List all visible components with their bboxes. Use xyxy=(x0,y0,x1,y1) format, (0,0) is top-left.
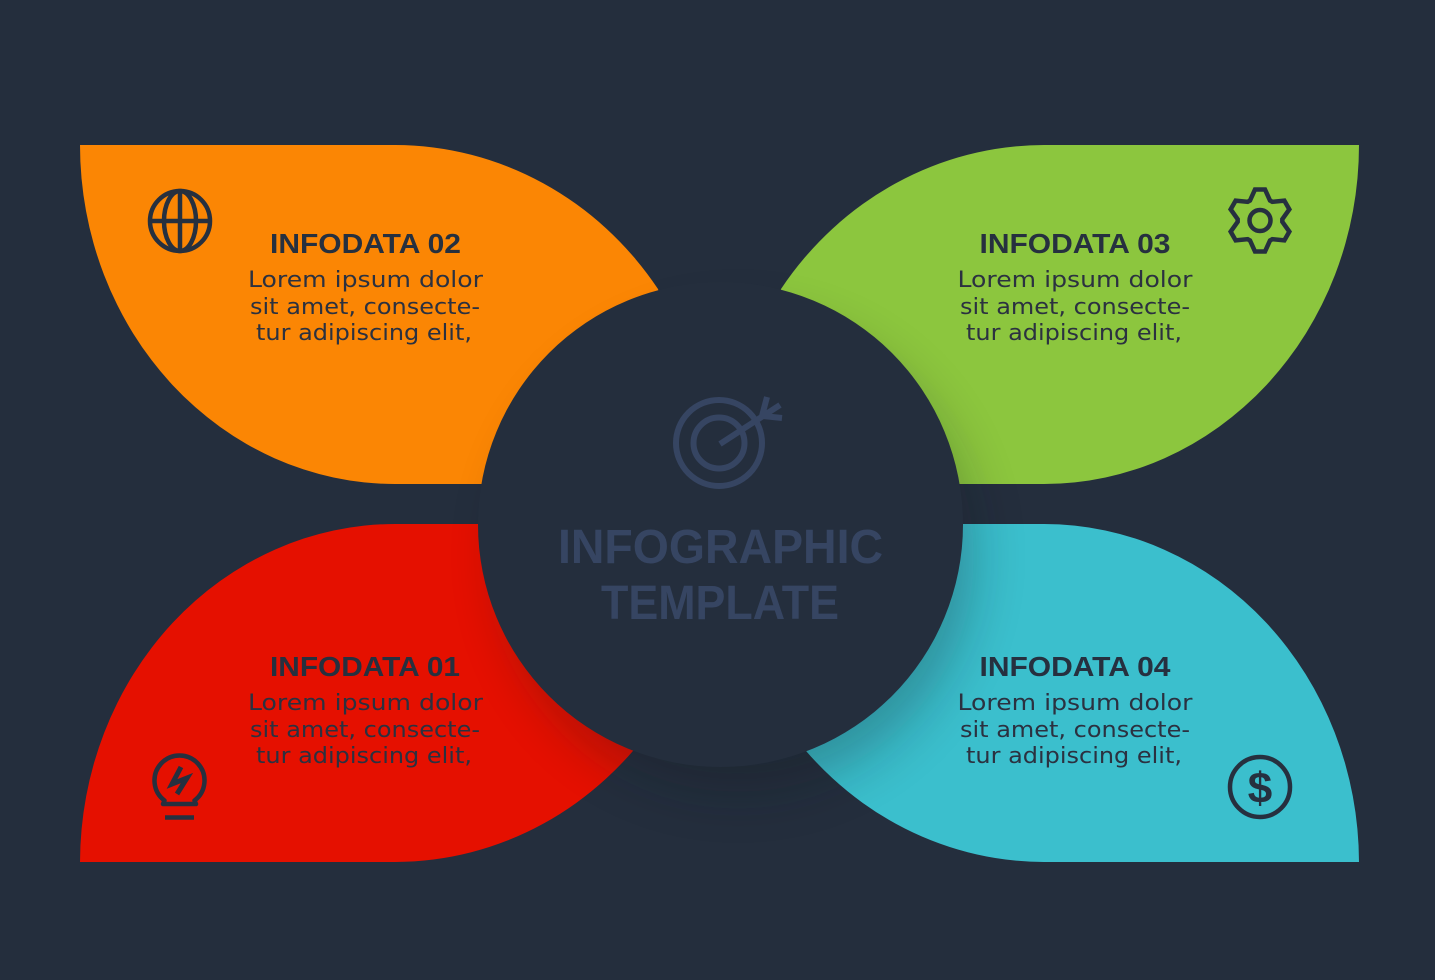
text block: infodata 02: INFODATA 02 xyxy=(270,228,461,259)
text block: infodata 01: Lorem ipsum dolor xyxy=(248,691,484,716)
panel: infodata 04 teal leaf xyxy=(720,500,1359,862)
text block: infodata 01: INFODATA 01 xyxy=(270,651,460,682)
text block: infodata 03 xyxy=(958,228,1194,346)
center title: TEMPLATE xyxy=(601,577,839,630)
icon: gear xyxy=(1231,190,1289,252)
icon: dollar coin xyxy=(1230,757,1290,817)
text block: infodata 04: tur adipiscing elit, xyxy=(966,744,1182,769)
text block: infodata 03: tur adipiscing elit, xyxy=(966,321,1182,346)
text block: infodata 04: sit amet, consecte- xyxy=(960,718,1190,743)
text block: infodata 02 xyxy=(248,228,484,346)
text block: infodata 03: INFODATA 03 xyxy=(980,228,1170,259)
icon: target with arrow xyxy=(676,397,782,486)
text block: infodata 04 xyxy=(958,651,1194,769)
icon: dollar coin: $ xyxy=(1248,764,1272,813)
center title xyxy=(558,521,883,630)
text block: infodata 04: INFODATA 04 xyxy=(980,651,1171,682)
icon: light bulb xyxy=(154,756,204,818)
text block: infodata 02: sit amet, consecte- xyxy=(250,295,480,320)
panel: infodata 01 red leaf xyxy=(80,500,720,862)
text block: infodata 01: tur adipiscing elit, xyxy=(256,744,472,769)
text block: infodata 03: sit amet, consecte- xyxy=(960,295,1190,320)
panel: infodata 03 green leaf xyxy=(720,145,1359,500)
text block: infodata 02: tur adipiscing elit, xyxy=(256,321,472,346)
icon: globe xyxy=(150,191,210,251)
center title: INFOGRAPHIC xyxy=(558,521,883,574)
center circle shadow xyxy=(502,320,974,792)
panel: infodata 02 orange leaf xyxy=(80,145,720,500)
panel: center circle xyxy=(478,282,963,767)
text block: infodata 02: Lorem ipsum dolor xyxy=(248,268,484,293)
text block: infodata 01: sit amet, consecte- xyxy=(250,718,480,743)
text block: infodata 04: Lorem ipsum dolor xyxy=(958,691,1194,716)
text block: infodata 03: Lorem ipsum dolor xyxy=(958,268,1194,293)
text block: infodata 01 xyxy=(248,651,484,769)
